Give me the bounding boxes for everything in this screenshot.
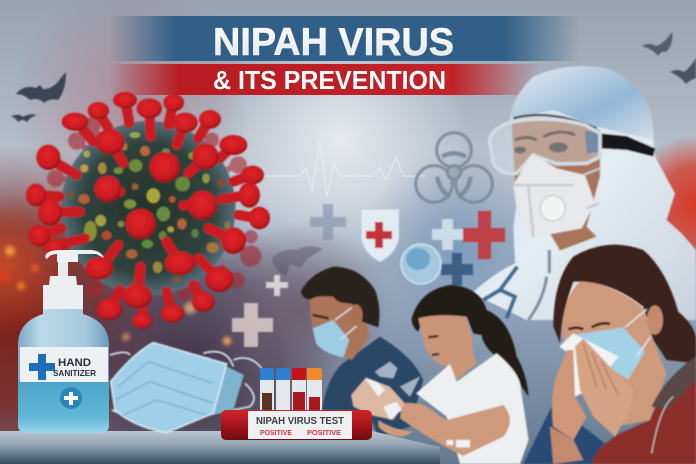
title: Nipah Virus: NIPAH VIRUS bbox=[213, 21, 454, 64]
label text: sanitizer: SANITIZER bbox=[53, 368, 96, 378]
back spikes bbox=[47, 117, 261, 301]
health worker in protective suit bbox=[472, 66, 696, 320]
zipper bbox=[528, 250, 549, 320]
man wearing mask bbox=[301, 267, 423, 437]
face bbox=[512, 118, 600, 251]
neck and face bbox=[310, 294, 370, 360]
hand sanitizer bottle bbox=[18, 250, 109, 433]
positive result left: POSITIVE bbox=[260, 428, 292, 437]
front mask bbox=[111, 343, 227, 433]
positive result right: POSITIVE bbox=[307, 428, 341, 437]
nipah test tube bbox=[221, 410, 372, 440]
pump collar bbox=[43, 276, 83, 309]
hair bbox=[553, 245, 696, 363]
surgical mask bbox=[313, 320, 349, 357]
shield icon bbox=[361, 209, 399, 262]
blood sample tubes bbox=[260, 368, 322, 410]
eyes bbox=[568, 323, 610, 329]
front spikes bbox=[37, 102, 258, 320]
surgical mask bbox=[573, 327, 645, 379]
sanitizer liquid bbox=[18, 380, 109, 433]
hoodie hood bbox=[652, 356, 696, 410]
bottle label bbox=[20, 347, 108, 382]
bats bbox=[11, 32, 696, 122]
spike heads bbox=[26, 92, 270, 329]
goggle strap bbox=[600, 133, 655, 157]
title band: red bbox=[110, 64, 540, 95]
shirt bbox=[322, 337, 423, 437]
virus body bbox=[61, 121, 236, 296]
title band: blue bbox=[110, 16, 580, 64]
surgical mask on table bbox=[110, 343, 262, 433]
bottle shell bbox=[18, 309, 109, 433]
biohazard symbol bbox=[416, 133, 492, 202]
eyes and brows bbox=[515, 132, 575, 140]
respirator valve bbox=[540, 196, 565, 221]
floating medical crosses bbox=[232, 204, 505, 347]
drawstring bbox=[652, 397, 673, 453]
ear bbox=[349, 304, 363, 326]
protective suit bbox=[472, 66, 696, 320]
eye and lips bbox=[428, 336, 439, 355]
surface bumps bbox=[67, 132, 230, 283]
pleats bbox=[115, 362, 213, 415]
red hoodie bbox=[592, 357, 696, 464]
table bbox=[0, 431, 440, 464]
face bbox=[418, 315, 477, 380]
wrist bbox=[550, 427, 583, 464]
back mask bbox=[207, 357, 244, 417]
tissue bbox=[559, 333, 618, 397]
respirator mask bbox=[513, 153, 595, 237]
hair bbox=[301, 267, 379, 327]
ear loops bbox=[110, 352, 262, 415]
liquid plus badge bbox=[60, 387, 82, 409]
soap splashes bbox=[375, 362, 420, 397]
glass orb bbox=[401, 244, 441, 284]
pump stem bbox=[58, 262, 68, 284]
tube title: NIPAH VIRUS TEST bbox=[256, 416, 344, 427]
finger lines bbox=[583, 343, 618, 395]
plus icon bbox=[29, 354, 55, 380]
label text: hand: HAND bbox=[58, 357, 91, 369]
soapy hands bbox=[351, 377, 405, 420]
dark blue shirt bbox=[523, 403, 605, 464]
goggles bbox=[489, 119, 600, 174]
t-shirt bbox=[416, 353, 529, 464]
arms bbox=[400, 403, 510, 456]
stethoscope bbox=[483, 267, 517, 318]
virus bbox=[26, 92, 270, 329]
woman washing hands bbox=[351, 285, 529, 464]
world map silhouette bbox=[272, 246, 323, 276]
woman with tissue bbox=[523, 245, 696, 464]
hands bbox=[552, 350, 587, 440]
hood bbox=[510, 66, 653, 140]
ecg heartbeat line bbox=[262, 140, 425, 196]
eye bbox=[313, 315, 328, 318]
face and neck bbox=[562, 282, 667, 427]
ear bbox=[647, 305, 663, 335]
pump nozzle bbox=[45, 250, 104, 262]
ponytail and hair bbox=[412, 285, 529, 397]
subtitle: and its prevention: & ITS PREVENTION bbox=[213, 65, 446, 95]
